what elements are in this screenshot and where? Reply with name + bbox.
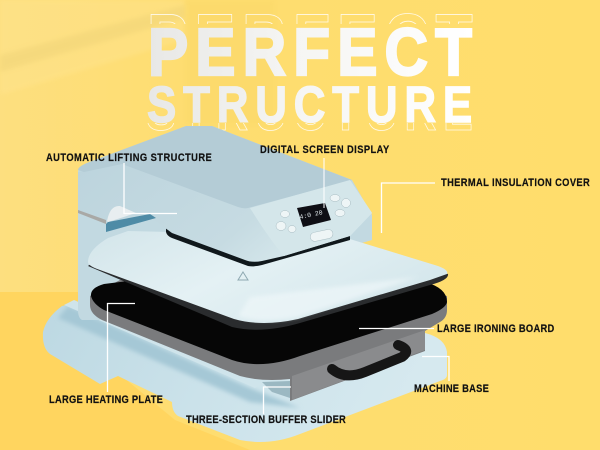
handle <box>332 345 406 375</box>
leader: three-section buffer slider <box>264 387 291 414</box>
label: automatic lifting structure: AUTOMATIC LIFTING STRUCTURE <box>46 152 212 164</box>
title line: structure: STRUCTURE <box>147 77 472 134</box>
label: digital screen display: DIGITAL SCREEN DISPLAY <box>260 144 389 156</box>
digital display: 4:0 20 <box>299 209 323 221</box>
leader: automatic lifting structure <box>124 163 177 214</box>
dark underside <box>166 222 350 266</box>
label: three-section buffer slider: THREE-SECTION BUFFER SLIDER <box>186 414 346 426</box>
logo mark <box>238 272 248 280</box>
title line: perfect: PERFECT <box>148 14 472 90</box>
label: large ironing board: LARGE IRONING BOARD <box>437 323 554 335</box>
label: machine base: MACHINE BASE <box>414 383 489 395</box>
machine base <box>43 298 447 442</box>
leader: machine base <box>422 356 449 381</box>
black plate <box>91 260 447 364</box>
heating cover <box>88 231 448 330</box>
label: large heating plate: LARGE HEATING PLATE <box>49 394 163 406</box>
back housing <box>78 126 372 320</box>
title ghost outline: structure: STRUCTURE <box>146 84 473 142</box>
buffer slider <box>262 381 290 398</box>
title <box>148 13 472 131</box>
heat press machine <box>43 126 448 442</box>
leader: thermal insulation cover <box>382 183 435 233</box>
leader: digital screen display <box>323 158 325 208</box>
title ghost outline: perfect: PERFECT <box>147 0 473 76</box>
leader: large ironing board <box>359 328 434 330</box>
lower plate rim <box>90 280 447 401</box>
lid top surface <box>78 126 352 208</box>
control buttons <box>276 194 350 242</box>
leader: large heating plate <box>108 304 135 392</box>
control panel <box>250 180 372 256</box>
box front <box>292 330 425 400</box>
label: thermal insulation cover: THERMAL INSULATION COVER <box>441 177 590 189</box>
lid front <box>78 164 372 262</box>
lifting gap <box>78 206 156 232</box>
